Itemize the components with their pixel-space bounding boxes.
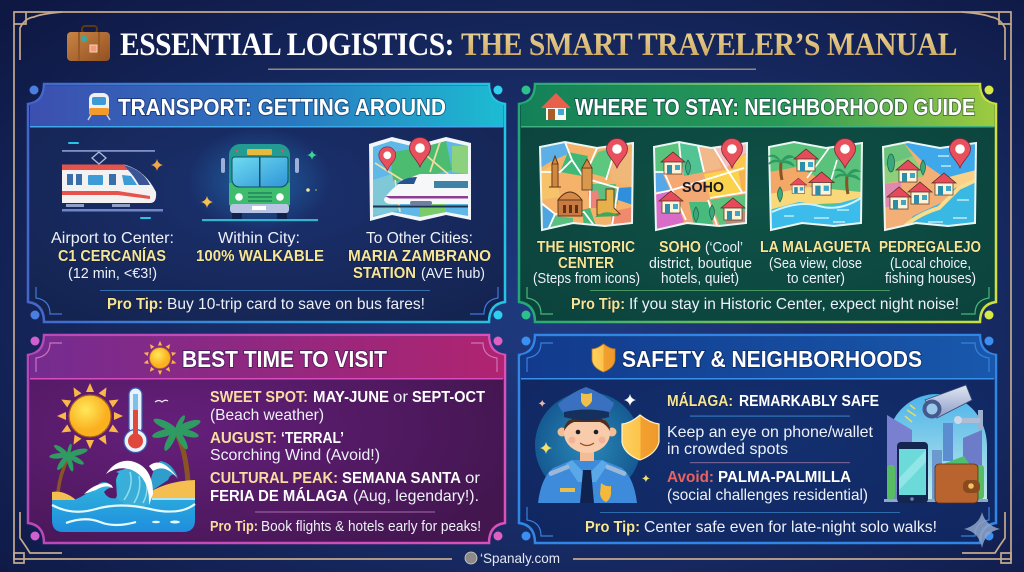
corner sparkle mark — [964, 512, 1000, 548]
visit: sweet spot: SEPT-OCT — [412, 389, 485, 406]
safety: keep an eye: Keep an eye on phone/wallet — [667, 424, 874, 441]
safety pro tip: Center safe even for late-night solo walks! — [644, 519, 937, 536]
icon: commuter train — [62, 142, 163, 219]
transport: other cities text: (AVE hub) — [421, 265, 485, 282]
stay: historic center text: (Steps from icons) — [533, 270, 640, 287]
visit: sweet spot: MAY-JUNE — [313, 389, 389, 406]
stay: la malagueta text: to center) — [787, 270, 845, 287]
panel 3 header bar — [30, 336, 504, 379]
icon: map with high-speed train — [369, 137, 471, 221]
transport: other cities text — [348, 230, 491, 282]
illustration: palm trees — [49, 414, 202, 492]
icon: suitcase — [67, 26, 110, 61]
icon: gold shield — [622, 415, 659, 460]
transport: other cities text: To Other Cities: — [366, 230, 473, 247]
safety: avoid: (social challenges residential) — [667, 487, 868, 504]
transport: airport text — [51, 230, 174, 282]
panel 4 header bar — [521, 336, 994, 379]
transport: city text — [196, 230, 324, 265]
map: la malagueta — [767, 138, 867, 234]
title text gold: THE SMART TRAVELER’S MANUAL — [461, 27, 957, 63]
panel 1 heading: TRANSPORT: GETTING AROUND — [118, 94, 446, 120]
visit: sweet spot: SWEET SPOT: — [210, 389, 308, 406]
safety: avoid: PALMA-PALMILLA — [718, 469, 851, 486]
visit: august: ‘TERRAL’ — [281, 430, 344, 447]
safety: keep an eye — [667, 424, 874, 458]
stay: pedregalejo text — [879, 239, 981, 287]
transport: other cities text: STATION — [353, 265, 416, 282]
stay: la malagueta text: LA MALAGUETA — [760, 239, 871, 256]
map: historic center — [538, 138, 638, 234]
safety: remarkably safe: REMARKABLY SAFE — [739, 393, 879, 410]
stay: soho text: hotels, quiet) — [661, 270, 739, 287]
stay pro tip: Pro Tip: — [571, 296, 625, 313]
stay: la malagueta text — [760, 239, 871, 287]
panel 3 body — [28, 335, 505, 543]
visit: cultural peak — [210, 470, 481, 505]
visit: sweet spot: (Beach weather) — [210, 407, 324, 424]
map: soho — [652, 138, 752, 234]
footer brand: ‘Spanaly.com — [480, 550, 560, 566]
stay: soho text: SOHO — [659, 239, 701, 256]
panel: transport — [28, 84, 505, 322]
stay: historic center text: THE HISTORIC — [537, 239, 635, 256]
safety: avoid: Avoid: — [667, 469, 714, 486]
panel 2 body — [519, 84, 996, 322]
stay pro tip: If you stay in Historic Center, expect night noise! — [629, 296, 959, 313]
transport pro tip: Pro Tip: — [107, 296, 163, 313]
transport: city text: Within City: — [218, 230, 300, 247]
stay: historic center text: CENTER — [558, 255, 614, 272]
illustration: waves and beach — [52, 461, 195, 532]
illustration: thermometer — [124, 388, 168, 452]
visit: sweet spot — [210, 389, 485, 424]
visit: cultural peak: CULTURAL PEAK: — [210, 470, 338, 487]
safety pro tip: Pro Tip: — [585, 519, 640, 536]
icon: header sun — [143, 341, 177, 375]
panel 1 body — [28, 84, 505, 322]
stay: historic center text — [533, 239, 640, 287]
icon: header shield — [592, 344, 615, 372]
stay: soho text — [649, 239, 752, 287]
illustration: police officer — [535, 387, 650, 503]
illustration: sun — [57, 383, 123, 449]
visit: sweet spot: or — [393, 389, 409, 406]
panel 2 header bar — [521, 86, 994, 127]
map label: SOHO: SOHO — [682, 179, 724, 196]
safety: remarkably safe: MÁLAGA: — [667, 391, 733, 410]
title text white: ESSENTIAL LOGISTICS: — [120, 27, 454, 63]
panel: safety — [519, 335, 996, 543]
icon: header house — [541, 93, 571, 120]
panel 1 header bar — [30, 86, 504, 127]
safety: keep an eye: in crowded spots — [667, 441, 788, 458]
visit: august — [210, 430, 380, 464]
panel 4 body — [519, 335, 996, 543]
visit: august: Scorching Wind (Avoid!) — [210, 447, 380, 464]
transport: airport text: C1 CERCANÍAS — [58, 246, 166, 265]
visit pro tip: Pro Tip: — [210, 518, 258, 535]
stay: pedregalejo text: (Local choice, — [890, 255, 971, 272]
stay: soho text: (‘Cool’ — [705, 239, 743, 256]
panel: best time to visit — [28, 335, 505, 543]
panel: where to stay — [519, 84, 996, 322]
panel 4 heading: SAFETY & NEIGHBORHOODS — [622, 346, 922, 372]
transport: airport text: (12 min, <€3!) — [68, 265, 157, 282]
illustration: camera, phone and wallet — [884, 385, 988, 503]
stay: pedregalejo text: fishing houses) — [885, 270, 976, 287]
stay: soho text: district, boutique — [649, 255, 752, 272]
visit: cultural peak: SEMANA SANTA — [342, 470, 461, 487]
visit pro tip: Book flights & hotels early for peaks! — [261, 518, 481, 535]
title — [67, 26, 957, 70]
transport pro tip: Buy 10-trip card to save on bus fares! — [167, 296, 425, 313]
visit: cultural peak: or — [465, 470, 481, 487]
stay: pedregalejo text: PEDREGALEJO — [879, 239, 981, 256]
icon: city bus — [187, 128, 331, 232]
transport: other cities text: MARIA ZAMBRANO — [348, 248, 491, 265]
map: pedregalejo — [881, 138, 981, 234]
transport: city text: 100% WALKABLE — [196, 248, 324, 265]
visit: cultural peak: FERIA DE MÁLAGA — [210, 486, 348, 505]
visit: cultural peak: (Aug, legendary!). — [353, 488, 479, 505]
transport: airport text: Airport to Center: — [51, 230, 174, 247]
stay: la malagueta text: (Sea view, close — [769, 255, 862, 272]
panel 3 heading: BEST TIME TO VISIT — [182, 346, 387, 372]
visit: august: AUGUST: — [210, 430, 277, 447]
icon: header train — [88, 93, 110, 120]
safety: remarkably safe — [667, 391, 879, 410]
safety: avoid — [667, 469, 868, 504]
